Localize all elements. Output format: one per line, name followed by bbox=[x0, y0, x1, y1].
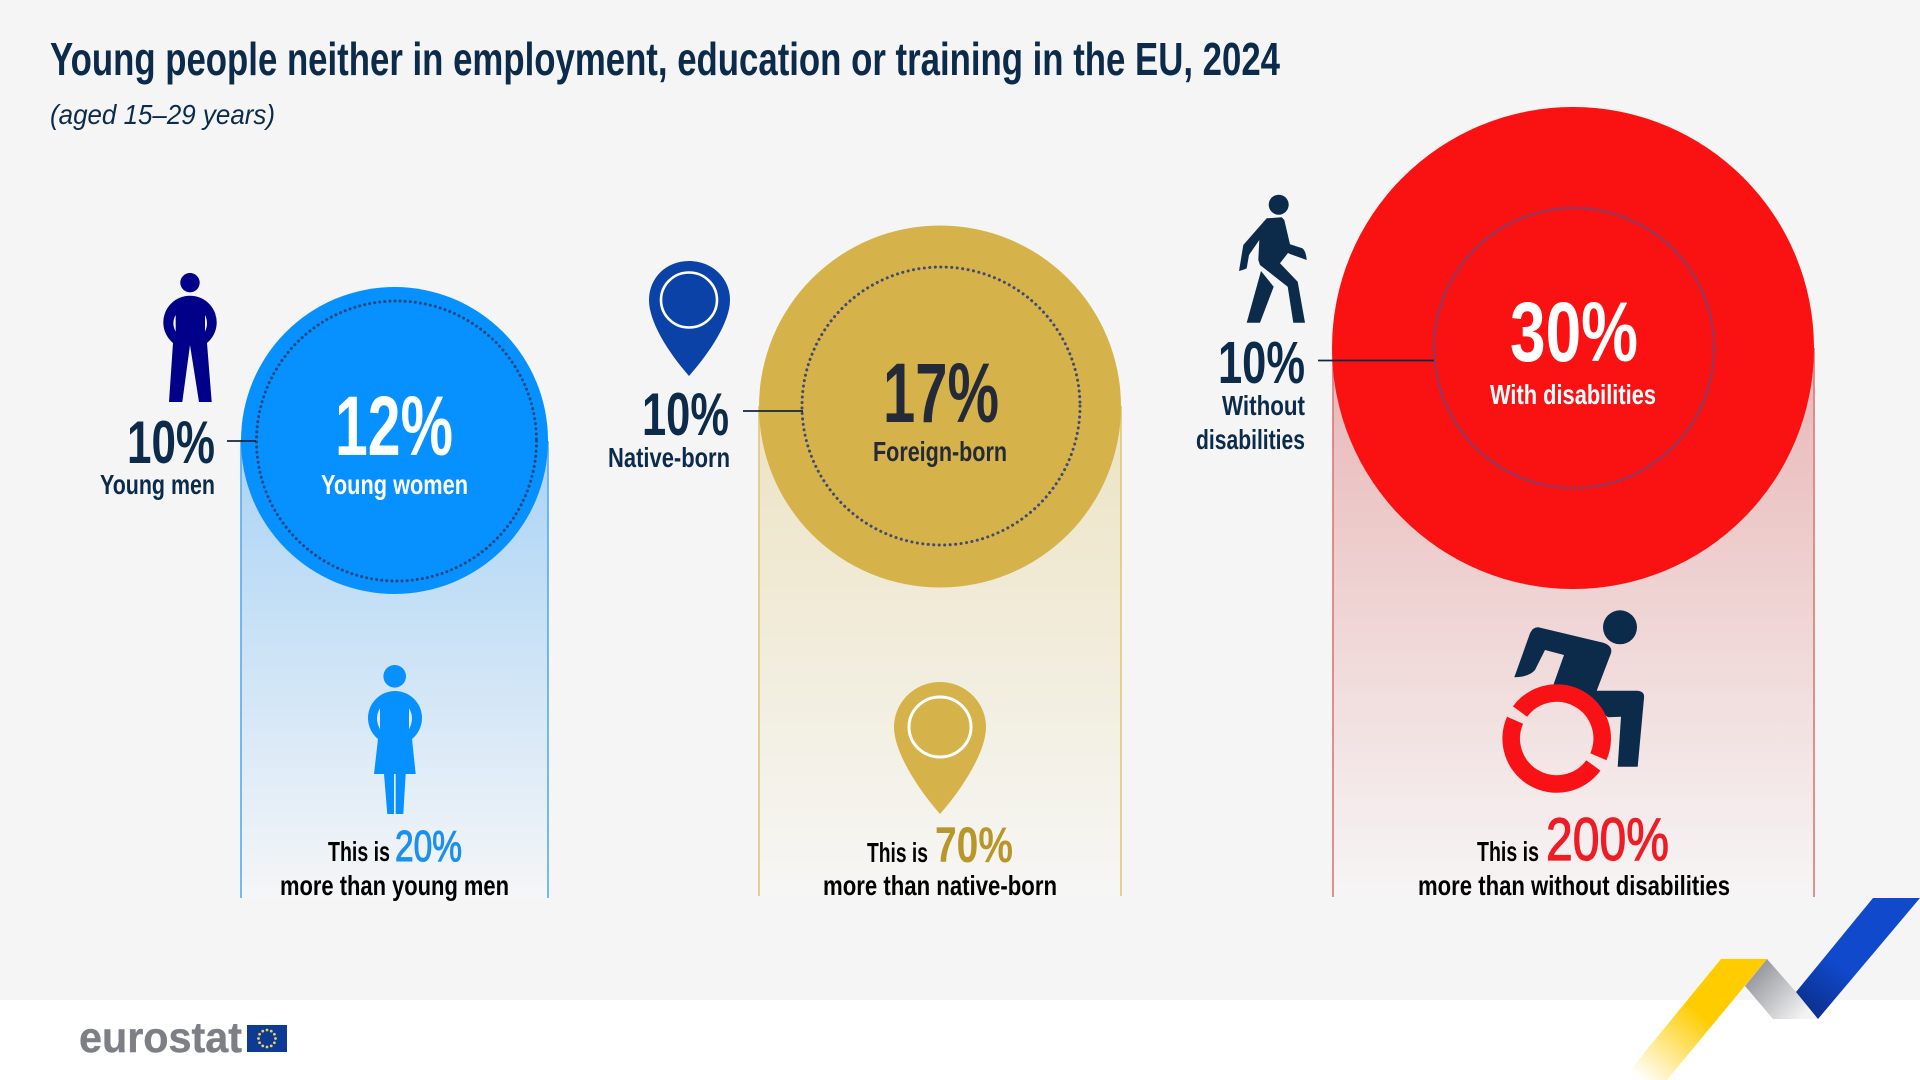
comparison text: women: 20% bbox=[395, 822, 462, 871]
EU flag bbox=[247, 1025, 287, 1052]
gradient column: women bbox=[241, 441, 548, 898]
connector line: native-born bbox=[743, 410, 803, 412]
comparison text: with disabilities: This is bbox=[1477, 836, 1539, 867]
dotted reference circle: young men bbox=[256, 301, 536, 581]
circle: young women 12% bbox=[241, 287, 548, 594]
value: young women 12%: 12% bbox=[335, 379, 453, 473]
comparison text: women: more than young men bbox=[280, 870, 509, 901]
icon: man bbox=[163, 273, 217, 402]
decorative ribbon bbox=[1622, 898, 1920, 1080]
circle: with disabilities 30% bbox=[1332, 107, 1814, 589]
panel: place of birth bbox=[608, 226, 1121, 901]
icon: blue map pin bbox=[649, 261, 730, 376]
icon: walking person bbox=[1239, 195, 1307, 323]
subtitle: (aged 15–29 years) bbox=[50, 99, 275, 130]
gradient column: with disabilities bbox=[1333, 348, 1814, 897]
value: with disabilities 30%: 30% bbox=[1510, 285, 1638, 379]
label: without disabilities: disabilities bbox=[1196, 424, 1305, 455]
connector line: without disabilities bbox=[1318, 360, 1434, 362]
comparison text: with disabilities bbox=[1418, 806, 1730, 901]
comparison text: foreign-born bbox=[823, 817, 1057, 901]
icon: gold map pin bbox=[894, 682, 986, 814]
gradient column: foreign-born bbox=[759, 406, 1121, 896]
panel: gender bbox=[100, 273, 548, 901]
eurostat logo bbox=[79, 1014, 287, 1062]
comparison text: women bbox=[280, 822, 509, 901]
comparison text: foreign-born: more than native-born bbox=[823, 870, 1057, 901]
label: native-born: Native-born bbox=[608, 442, 730, 473]
title: Young people neither in employment, education or training in the EU, 2024 bbox=[50, 33, 1280, 85]
dotted reference circle: without disabilities bbox=[1434, 208, 1714, 488]
value: foreign-born 17%: 17% bbox=[883, 346, 999, 440]
icon: woman bbox=[368, 665, 422, 814]
dotted reference circle: native-born bbox=[802, 267, 1080, 545]
icon: wheelchair user bbox=[1511, 610, 1644, 784]
label: without disabilities: Without bbox=[1222, 390, 1305, 421]
comparison text: with disabilities: more than without disabilities bbox=[1418, 870, 1730, 901]
label: young men: Young men bbox=[100, 469, 215, 500]
label: young women: Young women bbox=[321, 469, 468, 500]
connector line: young men bbox=[227, 440, 256, 442]
value: without disabilities 10%: 10% bbox=[1218, 330, 1305, 396]
comparison text: with disabilities: 200% bbox=[1546, 806, 1669, 873]
comparison text: foreign-born: This is bbox=[867, 837, 928, 868]
label: without disabilities bbox=[1196, 390, 1305, 455]
value: young men 10%: 10% bbox=[127, 409, 215, 476]
value: native-born 10%: 10% bbox=[642, 381, 729, 448]
logo wordmark: eurostat bbox=[79, 1014, 242, 1062]
comparison text: women: This is bbox=[328, 836, 390, 867]
panel: disability bbox=[1196, 107, 1814, 901]
label: with disabilities: With disabilities bbox=[1490, 379, 1656, 410]
comparison text: foreign-born: 70% bbox=[935, 817, 1013, 873]
circle: foreign-born 17% bbox=[759, 226, 1121, 588]
label: foreign-born: Foreign-born bbox=[873, 436, 1007, 467]
